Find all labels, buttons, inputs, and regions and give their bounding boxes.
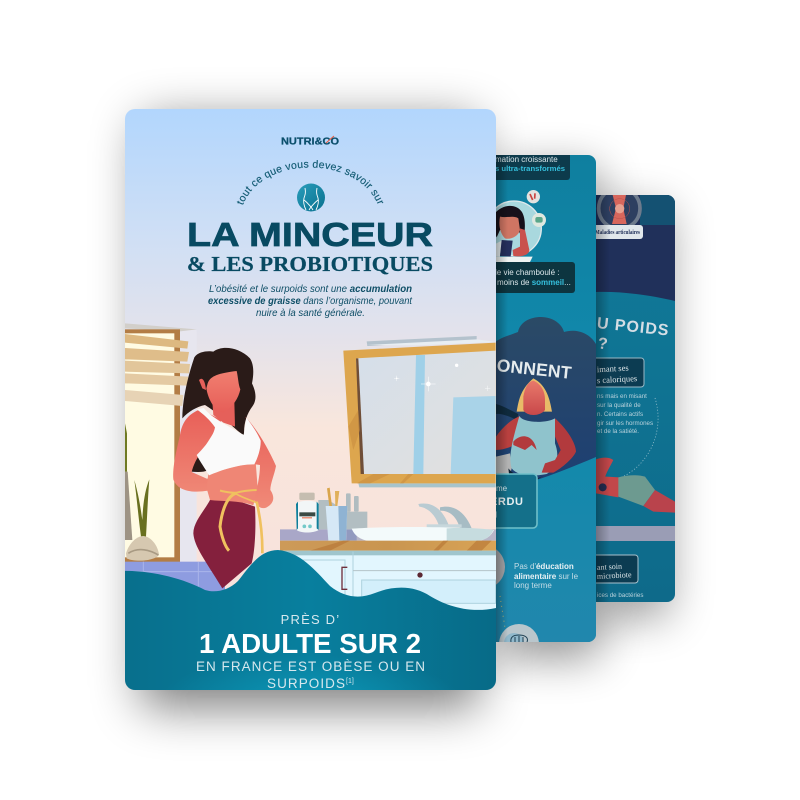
text block: actives: ns mais en misant (597, 393, 647, 400)
shadow of middle card on back card (596, 195, 608, 602)
illustration: woman on phone (496, 190, 546, 262)
plant (125, 423, 159, 561)
skin: belly (207, 462, 258, 505)
logo: NUTRI&CO (281, 136, 339, 148)
callout: disrupted life: moins de sommeil... (497, 278, 571, 287)
window blinds (125, 334, 190, 406)
callout: calorie box (596, 358, 644, 388)
callout: lost weight: me (496, 484, 508, 493)
text block: actives: gir sur les hormones (597, 420, 653, 427)
text block: actives: et de la satiété. (597, 428, 639, 435)
label: joint diseases: Maladies articulaires (595, 230, 641, 236)
title: LA MINCEUR (187, 217, 433, 254)
panel: front card (cover) (125, 109, 496, 690)
floor (125, 562, 225, 592)
intro text (208, 284, 413, 319)
panel: middle card (page 2) (496, 155, 596, 642)
illustration: bathroom furniture (280, 336, 500, 614)
heading: weight question: U POIDS (596, 315, 670, 340)
subtitle: & LES PROBIOTIQUES (187, 252, 433, 276)
illustration: exercising figure (596, 458, 675, 513)
stat: description: [1] (346, 678, 354, 685)
ceiling edge (180, 361, 196, 562)
label: joint diseases (596, 225, 643, 239)
text: bacteria: ices de bactéries (597, 592, 643, 599)
toothbrush shadow (318, 500, 367, 529)
text: no nutrition education (514, 562, 579, 590)
cabinet lines (297, 552, 353, 603)
vanity cabinet (280, 551, 500, 614)
callout: calorie box: s caloriques (597, 373, 637, 385)
top (197, 408, 261, 475)
stat: près d': PRÈS D’ (281, 612, 340, 627)
text: no nutrition education: long terme (514, 581, 552, 590)
bottom wave (120, 550, 500, 695)
card background (125, 109, 496, 590)
icon: knee joint (596, 195, 642, 225)
callout: lost weight: ERDU (490, 496, 524, 508)
illustration: blonde woman (490, 378, 576, 482)
window frame and pane (123, 329, 180, 562)
hair (182, 348, 255, 435)
text block: actives (597, 393, 653, 435)
stat: description (196, 659, 425, 691)
callout: calorie box: imant ses (597, 363, 629, 374)
navy header section (596, 195, 675, 301)
illustration: woman measuring waist (173, 348, 276, 588)
arched subtitle: tout ce que vous devez savoir sur (236, 160, 384, 204)
callout: ultra-processed foods: mation croissante (495, 155, 558, 164)
sink (352, 527, 494, 541)
teal wave (538, 457, 596, 642)
dotted connector (500, 596, 505, 628)
icon: brain (499, 624, 539, 642)
callout: microbiota box: microbiote (597, 570, 632, 581)
wave glow (160, 610, 460, 700)
measuring tape (220, 490, 262, 553)
callout: lost weight: [3] (490, 511, 497, 518)
counter backsplash (280, 529, 357, 541)
face (206, 371, 240, 413)
pants (193, 499, 255, 588)
dotted circle (624, 398, 658, 476)
toothbrushes (327, 488, 339, 506)
logo (282, 136, 339, 145)
text block: actives: sur la qualité de (597, 402, 641, 409)
callout: disrupted life: le vie chamboulé : (495, 268, 559, 277)
callout: ultra-processed foods: s ultra-transformés (495, 164, 565, 173)
cabinet handle (342, 567, 347, 589)
lavender band (596, 526, 675, 541)
mirror (343, 336, 496, 487)
callout: disrupted life (496, 262, 575, 293)
heading: weight question: ? (597, 335, 609, 353)
drawer knob (417, 572, 423, 578)
text: no nutrition education: alimentaire sur le (514, 572, 579, 581)
neck (212, 402, 235, 427)
drop shadow behind the stack (140, 120, 670, 708)
intro text: excessive de graisse dans l’organisme, pouvant (208, 296, 413, 307)
intro text: nuire à la santé générale. (256, 308, 365, 319)
callout: ultra-processed foods (496, 155, 570, 180)
skin: left arm and shoulder (173, 409, 235, 498)
dark cloud section (490, 317, 596, 485)
illustration: window and plant (123, 323, 225, 598)
countertop (280, 541, 497, 551)
callout: microbiota box (596, 554, 638, 584)
product jar (296, 493, 319, 532)
panel: back card (page 3) (596, 195, 675, 602)
cup (326, 506, 347, 541)
stat: description: SURPOIDS (267, 676, 345, 691)
skin: right arm (245, 417, 276, 508)
shadow of cover on middle card (496, 155, 506, 642)
text: no nutrition education: Pas d'éducation (514, 562, 574, 571)
text block: actives: n. Certains actifs (597, 411, 643, 418)
heading: ONNENT: ONNENT (496, 355, 573, 383)
callout: lost weight (496, 473, 538, 529)
icon: slim waist badge (297, 184, 325, 212)
stat: 1 adulte sur 2: 1 ADULTE SUR 2 (199, 628, 421, 659)
heading: weight question (598, 317, 668, 349)
callout: microbiota box: ant soin (597, 562, 622, 572)
intro text: L’obésité et le surpoids sont une accumulation (209, 284, 412, 295)
icon: grey circle (496, 549, 505, 584)
stat: description: EN FRANCE EST OBÈSE OU EN (196, 659, 425, 674)
faucet (418, 504, 472, 528)
